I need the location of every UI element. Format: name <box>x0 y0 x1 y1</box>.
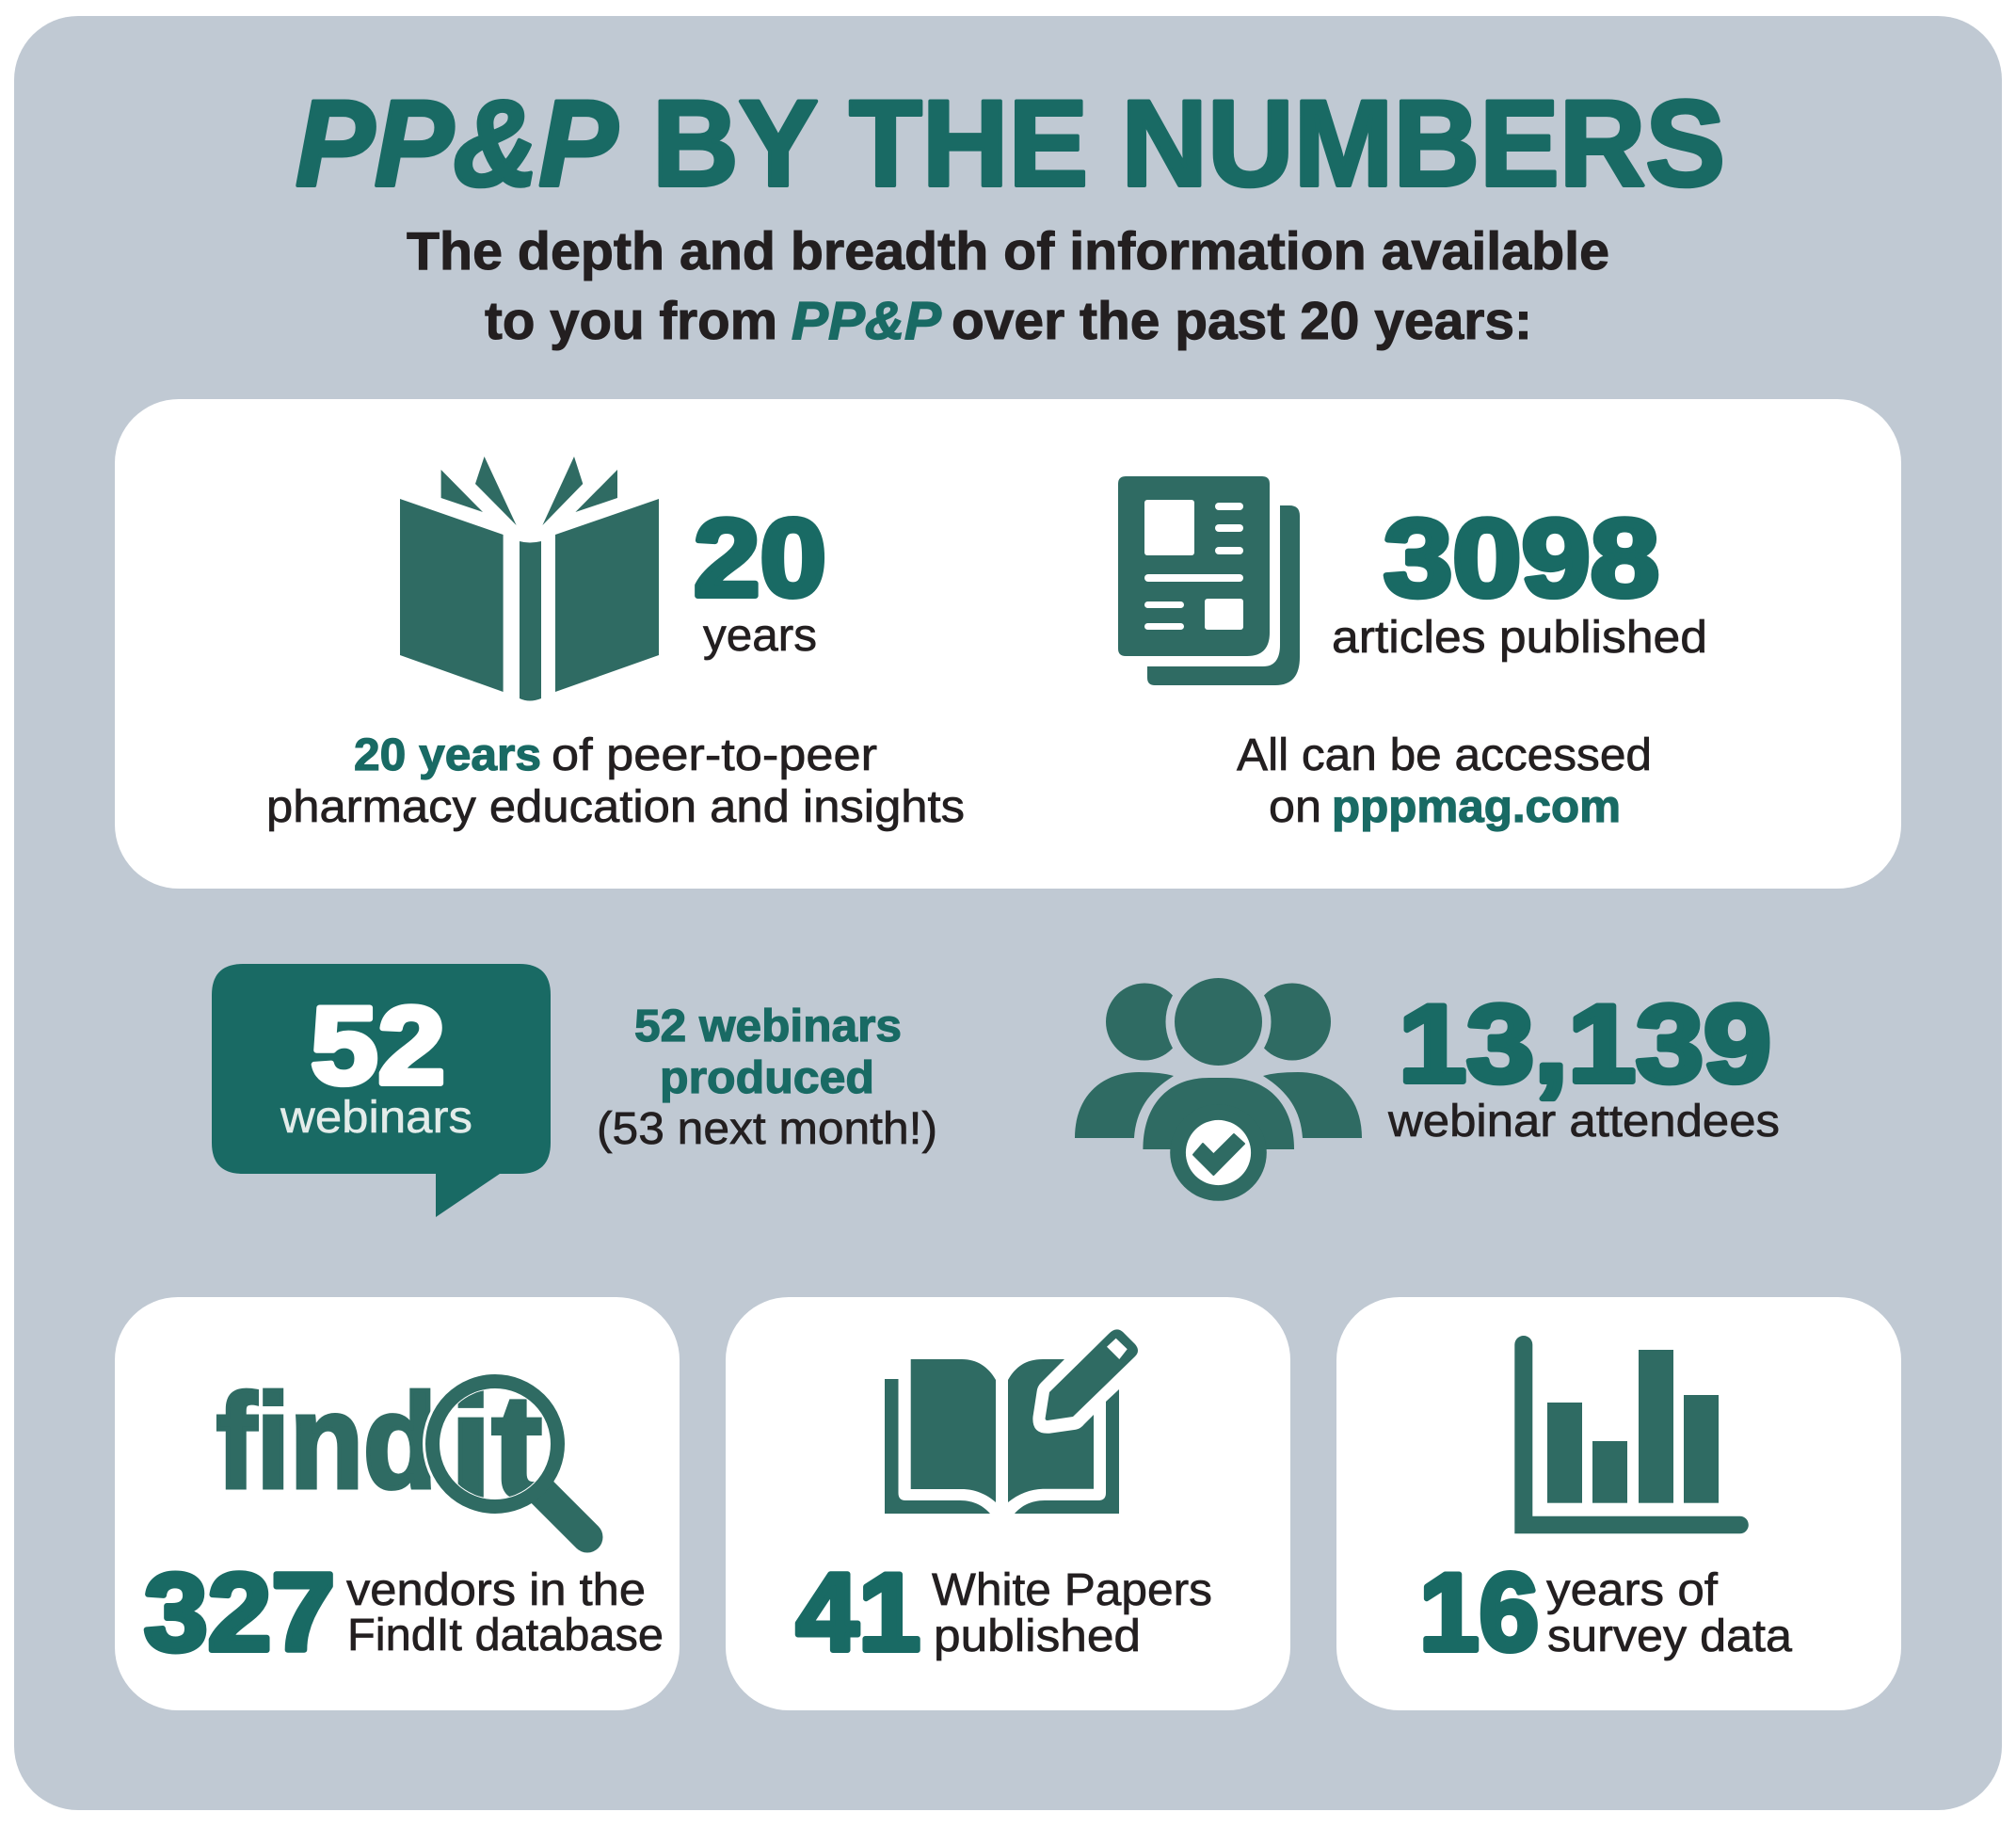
stat: 41 White Papers: published <box>934 1612 1141 1661</box>
icon: bar chart <box>1514 1336 1749 1533</box>
stat: 327 vendors: FindIt database <box>347 1611 664 1660</box>
text: 52 webinars produced: 52 webinars <box>634 1002 902 1051</box>
panel: FindIt vendors <box>115 1297 680 1710</box>
icon: FindIt logo with magnifier: find <box>216 1367 437 1516</box>
panel: White Papers <box>726 1297 1290 1710</box>
stat: 16 years of survey data: 16 <box>1419 1550 1539 1674</box>
icon: newspaper <box>1118 476 1300 685</box>
panel: top white card <box>115 399 1901 889</box>
icon: open book <box>400 457 659 700</box>
title: BY THE NUMBERS <box>652 74 1725 212</box>
stat: 41 White Papers <box>796 1550 1212 1674</box>
text: 20 years of peer-to-peer: 20 years <box>354 730 541 780</box>
stat: 16 years of survey data <box>1419 1550 1792 1674</box>
icon: book and pen <box>885 1329 1138 1514</box>
stat: 20 years <box>694 496 826 661</box>
stat: 327 vendors: vendors in the <box>346 1565 646 1615</box>
subtitle <box>407 221 1609 351</box>
stat: 16 years of survey data: survey data <box>1547 1612 1792 1661</box>
stat: 41 White Papers: White Papers <box>932 1565 1212 1615</box>
title: PP&P <box>296 74 617 212</box>
stat: 13,139 webinar attendees: webinar attendees <box>1387 1097 1780 1147</box>
text: 52 webinars produced: (53 next month!) <box>597 1104 937 1154</box>
speech bubble: 52 webinars: 52 <box>311 984 445 1107</box>
stat: 16 years of survey data: years of <box>1546 1565 1719 1615</box>
speech bubble: 52 webinars: webinars <box>280 1093 472 1143</box>
text: all can be accessed: All can be accessed <box>1237 730 1652 780</box>
stat: 13,139 webinar attendees: 13,139 <box>1399 982 1771 1105</box>
stat: 20 years: 20 <box>694 496 826 619</box>
icon: FindIt logo with magnifier <box>216 1365 587 1537</box>
subtitle: over the past 20 years: <box>952 291 1532 351</box>
stat: 327 vendors: 327 <box>144 1550 335 1674</box>
text: 52 webinars produced <box>597 1002 937 1154</box>
text: 20 years of peer-to-peer: pharmacy education and insights <box>266 782 965 832</box>
panel: survey data <box>1336 1297 1901 1710</box>
stat: 20 years: years <box>703 611 817 661</box>
speech bubble: 52 webinars <box>212 964 551 1217</box>
icon: attendees group <box>1075 970 1362 1201</box>
subtitle: PP&P <box>792 291 942 351</box>
stat: 13,139 webinar attendees <box>1387 982 1780 1147</box>
text: 20 years of peer-to-peer: of peer-to-peer <box>552 730 877 780</box>
stat: 3098 articles published: 3098 <box>1384 496 1659 619</box>
subtitle: to you from <box>485 291 777 351</box>
icon: FindIt logo with magnifier: it <box>450 1365 542 1528</box>
subtitle: The depth and breadth of information available <box>407 221 1609 281</box>
text: all can be accessed: on <box>1269 782 1321 832</box>
stat: 327 vendors <box>144 1550 664 1674</box>
text: 20 years of peer-to-peer <box>266 730 965 832</box>
stat: 3098 articles published: articles published <box>1332 613 1707 663</box>
stat: 3098 articles published <box>1332 496 1707 663</box>
stat: 41 White Papers: 41 <box>796 1550 920 1674</box>
text: all can be accessed: pppmag.com <box>1332 782 1621 832</box>
text: all can be accessed <box>1237 730 1652 832</box>
text: 52 webinars produced: produced <box>660 1053 874 1103</box>
